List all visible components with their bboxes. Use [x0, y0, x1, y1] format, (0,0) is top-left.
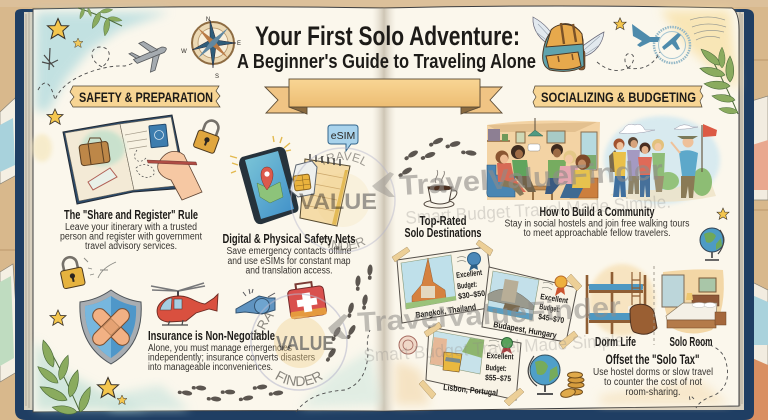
watermark text upper: Smart Budget Travel Made Simple.	[405, 192, 672, 228]
text: how to build a community: to meet approachable fellow travelers.	[524, 228, 670, 239]
icon: first aid kit	[287, 281, 327, 319]
watermark stamp lower: VALUE	[276, 333, 334, 355]
icon: padlock lower	[58, 255, 85, 289]
text: insurance is non-negotiable: Insurance is Non-Negotiable	[148, 329, 275, 343]
illustration: dorm bunk bed	[587, 264, 657, 336]
divider between rooms	[653, 266, 655, 345]
text: dorm life label: Dorm Life	[595, 335, 636, 349]
text: offset the solo tax	[593, 352, 713, 398]
postcard: Lisbon, Portugal: Budget:	[485, 363, 507, 373]
watermark stamp lower: FINDER	[275, 370, 323, 386]
footprints right of left page	[324, 264, 373, 363]
watermark text lower: Smart Budget Travel Made Simple.	[363, 329, 630, 366]
star and globe right	[700, 208, 729, 260]
watermark stamp upper: VALUE	[299, 189, 377, 214]
small bird and marks	[84, 258, 116, 278]
text: how to build a community: Stay in social hostels and join free walking tours	[504, 218, 690, 230]
text: how to build a community: How to Build a Community	[540, 205, 655, 219]
postcard: Bangkok, Thailand: Excellent	[456, 268, 483, 280]
text: share and register rule: person and register with government	[60, 232, 202, 242]
icon: backpack with wings	[533, 17, 604, 71]
watermark text lower	[356, 291, 630, 366]
empty ribbon banner	[265, 79, 502, 114]
footprints right page	[397, 136, 477, 178]
dashed path lower left page	[296, 330, 370, 412]
dashed path lower right	[690, 342, 728, 408]
leaves top left	[78, 7, 122, 36]
icon: compass: W	[181, 49, 187, 55]
text: digital and physical safety nets: and use eSIMs for constant map	[228, 256, 351, 267]
watermark stamp upper: TRAVEL	[318, 152, 365, 166]
leaves top right	[699, 46, 738, 115]
illustration: solo room	[662, 269, 726, 334]
text: digital and physical safety nets: Digital & Physical Safety Nets	[222, 232, 356, 246]
heading banner: socializing and budgeting: SOCIALIZING & BUDGETING	[541, 89, 696, 105]
heading banner: safety and preparation: SAFETY & PREPARATION	[79, 89, 213, 105]
icon: eSIM speech bubble: eSIM	[331, 130, 355, 142]
watermark stamp upper: FINDER	[320, 236, 366, 250]
text: top-rated solo destinations	[404, 214, 482, 240]
text: top-rated solo destinations: Solo Destinations	[404, 226, 482, 240]
postcard: Bangkok, Thailand: Bangkok, Thailand	[415, 302, 477, 320]
dashed flight path right	[597, 52, 660, 70]
icon: compass	[181, 17, 241, 80]
tape on Budapest postcard	[559, 274, 582, 349]
icon: compass: N	[206, 17, 210, 23]
postcard: Budapest, Hungary	[482, 267, 577, 342]
postcard: Lisbon, Portugal: Lisbon, Portugal	[443, 382, 499, 398]
icon: shield with bandage	[80, 290, 141, 364]
icon: airplane	[127, 35, 172, 77]
icon: padlock top	[193, 117, 224, 154]
icon: compass: S	[215, 74, 219, 80]
tape on Bangkok postcard	[392, 240, 493, 262]
watermark text upper: TravelValueFinder	[398, 154, 664, 201]
icon: coffee cup	[424, 170, 457, 208]
text: insurance is non-negotiable: Alone, you must manage emergencies	[148, 343, 292, 354]
icon: whistle	[236, 289, 275, 314]
text: solo room label: Solo Room	[670, 335, 712, 349]
stars top left	[47, 18, 83, 124]
postcard: Lisbon, Portugal	[426, 327, 521, 400]
postcard: Bangkok, Thailand: $30–$50	[458, 289, 486, 301]
text: share and register rule: Leave your itinerary with a trusted	[65, 222, 197, 233]
icon: phone with map pin	[230, 136, 298, 224]
postcards peeking out right	[745, 96, 768, 420]
text: how to build a community	[504, 205, 690, 239]
watermark text lower: TravelValueFinder	[356, 291, 622, 338]
icon: compass: E	[237, 41, 241, 47]
text: share and register rule: travel advisory services.	[85, 241, 177, 252]
heading banner: safety and preparation	[70, 86, 220, 107]
illustration: walking tour group	[604, 116, 720, 204]
heading banner: socializing and budgeting	[533, 86, 703, 107]
postcard: Budapest, Hungary: Budapest, Hungary	[493, 319, 558, 340]
postcards peeking out left	[0, 98, 22, 382]
icon: round seal	[399, 336, 417, 354]
text: offset the solo tax: Use hostel dorms or slow travel	[593, 367, 713, 378]
text: offset the solo tax: Offset the "Solo Tax"	[606, 352, 700, 367]
icon: notebook and SIM card	[290, 154, 350, 226]
small bird sketch	[42, 48, 58, 70]
watermark stamp lower	[250, 293, 348, 391]
text: digital and physical safety nets: and translation access.	[246, 266, 332, 276]
watermark stamp upper	[290, 147, 396, 253]
illustration: hostel common room	[487, 118, 600, 200]
footprints bottom	[177, 384, 283, 402]
icon: rescue helicopter	[151, 283, 218, 325]
icon: globe and coins	[528, 355, 584, 399]
postcard: Lisbon, Portugal: Excellent	[486, 351, 514, 361]
watermark text upper	[398, 154, 672, 228]
text: share and register rule: The "Share and Register" Rule	[64, 208, 198, 222]
postcard: Bangkok, Thailand	[397, 247, 494, 323]
postcard: Lisbon, Portugal: $55–$75	[485, 373, 512, 383]
title	[237, 21, 536, 73]
leaves bottom left with stars	[35, 310, 127, 416]
text: insurance is non-negotiable: into manageable inconveniences.	[148, 362, 273, 373]
postcard: Budapest, Hungary: Excellent	[540, 292, 569, 305]
text: offset the solo tax: to counter the cost of not	[604, 377, 702, 388]
icon: eSIM speech bubble	[328, 125, 358, 151]
postcard: Budapest, Hungary: $45–$70	[538, 312, 565, 325]
dashed flight path	[38, 47, 136, 100]
postcard: Budapest, Hungary: Budget:	[539, 302, 561, 314]
text: top-rated solo destinations: Top-Rated	[420, 214, 466, 228]
watermark stamp lower: TRA	[254, 312, 274, 336]
text: digital and physical safety nets	[222, 232, 356, 276]
title: A Beginner's Guide to Traveling Alone	[237, 50, 536, 73]
star and airplane stamp	[614, 17, 726, 63]
tape on Lisbon postcard	[419, 322, 524, 406]
text: share and register rule	[60, 208, 202, 252]
text: digital and physical safety nets: Save emergency contacts offline	[226, 246, 352, 257]
postcard: Bangkok, Thailand: Budget:	[457, 280, 478, 291]
icon: open journal with hand	[63, 115, 202, 204]
text: insurance is non-negotiable	[148, 329, 315, 373]
text: insurance is non-negotiable: independently; insurance converts disasters	[148, 352, 315, 364]
text: offset the solo tax: room-sharing.	[626, 387, 680, 398]
title: Your First Solo Adventure:	[255, 21, 520, 51]
